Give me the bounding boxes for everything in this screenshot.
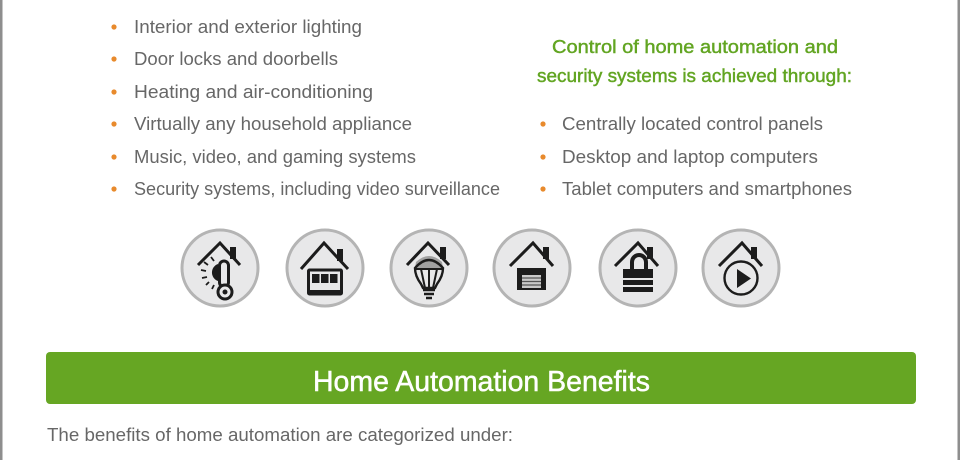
green heading: control of home automation: security systems is achieved through: [537, 65, 852, 86]
icon: light bulb [391, 230, 467, 306]
right list: control methods: Desktop and laptop computers [562, 146, 818, 167]
left list: things that can be automated: Virtually any household appliance [134, 113, 412, 134]
icon: thermostat and sun [182, 230, 258, 306]
icon: media play [703, 230, 779, 306]
left list: things that can be automated [111, 16, 500, 199]
icon: garage door [494, 230, 570, 306]
section banner: Home Automation Benefits: Home Automation Benefits [313, 366, 650, 398]
section banner: Home Automation Benefits [46, 352, 916, 404]
left list: things that can be automated: Music, video, and gaming systems [134, 146, 416, 167]
icon: home control panel [287, 230, 363, 306]
left list: things that can be automated: Heating and air-conditioning [134, 81, 373, 102]
left list: things that can be automated: Security systems, including video surveillance [134, 178, 500, 199]
icon: padlock [600, 230, 676, 306]
right list: control methods [540, 113, 852, 199]
right list: control methods: Centrally located control panels [562, 113, 823, 134]
left list: things that can be automated: Interior and exterior lighting [134, 16, 362, 37]
intro text: benefits categories: The benefits of home automation are categorized under: [47, 424, 513, 445]
green heading: control of home automation: Control of home automation and [552, 36, 838, 57]
left list: things that can be automated: Door locks and doorbells [134, 48, 338, 69]
right list: control methods: Tablet computers and smartphones [562, 178, 852, 199]
green heading: control of home automation [537, 36, 852, 86]
